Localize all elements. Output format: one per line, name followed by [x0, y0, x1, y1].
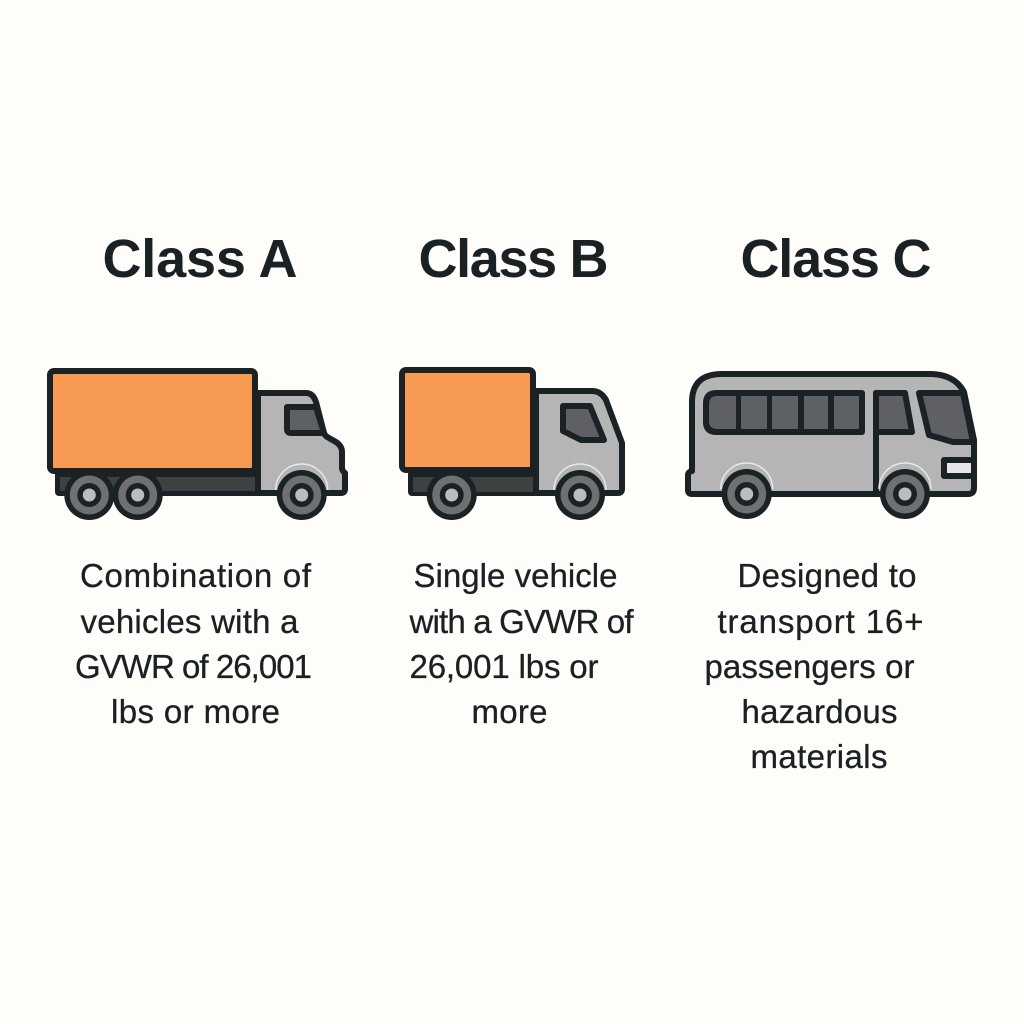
- description: Class C: transport 16+: [718, 603, 924, 640]
- cargo box: [402, 370, 533, 470]
- icon: single truck: [402, 370, 622, 520]
- chassis: [55, 470, 261, 496]
- passenger windows: [706, 393, 862, 432]
- wheel arch highlight: [554, 464, 606, 490]
- cab window: [287, 407, 324, 433]
- bus body: [688, 374, 974, 494]
- description: Class A: vehicles with a: [80, 603, 299, 640]
- cab: [536, 391, 622, 493]
- description: Class B: [408, 557, 634, 730]
- panel: Class C: [688, 229, 974, 775]
- headlight: [944, 460, 974, 476]
- front wheel: [879, 463, 931, 519]
- chassis: [408, 470, 538, 496]
- description: Class C: [704, 557, 924, 775]
- description: Class C: materials: [750, 738, 888, 775]
- heading: Class A: Class A: [102, 229, 298, 289]
- rear wheel: [721, 463, 773, 519]
- heading: Class C: Class C: [740, 229, 932, 289]
- cab window: [563, 406, 604, 440]
- door: [876, 393, 912, 494]
- icon: bus: [688, 374, 974, 519]
- panel: Class A: [50, 229, 345, 730]
- rear wheel one: [64, 470, 114, 520]
- icon: combination truck: [50, 371, 345, 520]
- description: Class A: Combination of: [80, 557, 312, 594]
- description: Class C: hazardous: [742, 693, 898, 730]
- description: Class A: GVWR of 26,001: [75, 648, 312, 685]
- cab: [258, 393, 345, 493]
- front wheel: [277, 470, 327, 520]
- description: Class A: lbs or more: [111, 693, 280, 730]
- rear wheel: [427, 470, 477, 520]
- front wheel: [555, 470, 605, 520]
- heading: Class B: Class B: [418, 229, 608, 289]
- description: Class C: Designed to: [738, 557, 916, 594]
- wheel arch highlight: [276, 464, 328, 490]
- description: Class B: more: [472, 693, 548, 730]
- cargo box: [50, 371, 255, 471]
- description: Class C: passengers or: [704, 648, 914, 685]
- windshield: [919, 393, 973, 442]
- description: Class B: 26,001 lbs or: [410, 648, 598, 685]
- description: Class A: [75, 557, 312, 730]
- rear wheel two: [113, 470, 163, 520]
- description: Class B: with a GVWR of: [408, 603, 634, 640]
- panel: Class B: [402, 229, 634, 730]
- description: Class B: Single vehicle: [414, 557, 618, 594]
